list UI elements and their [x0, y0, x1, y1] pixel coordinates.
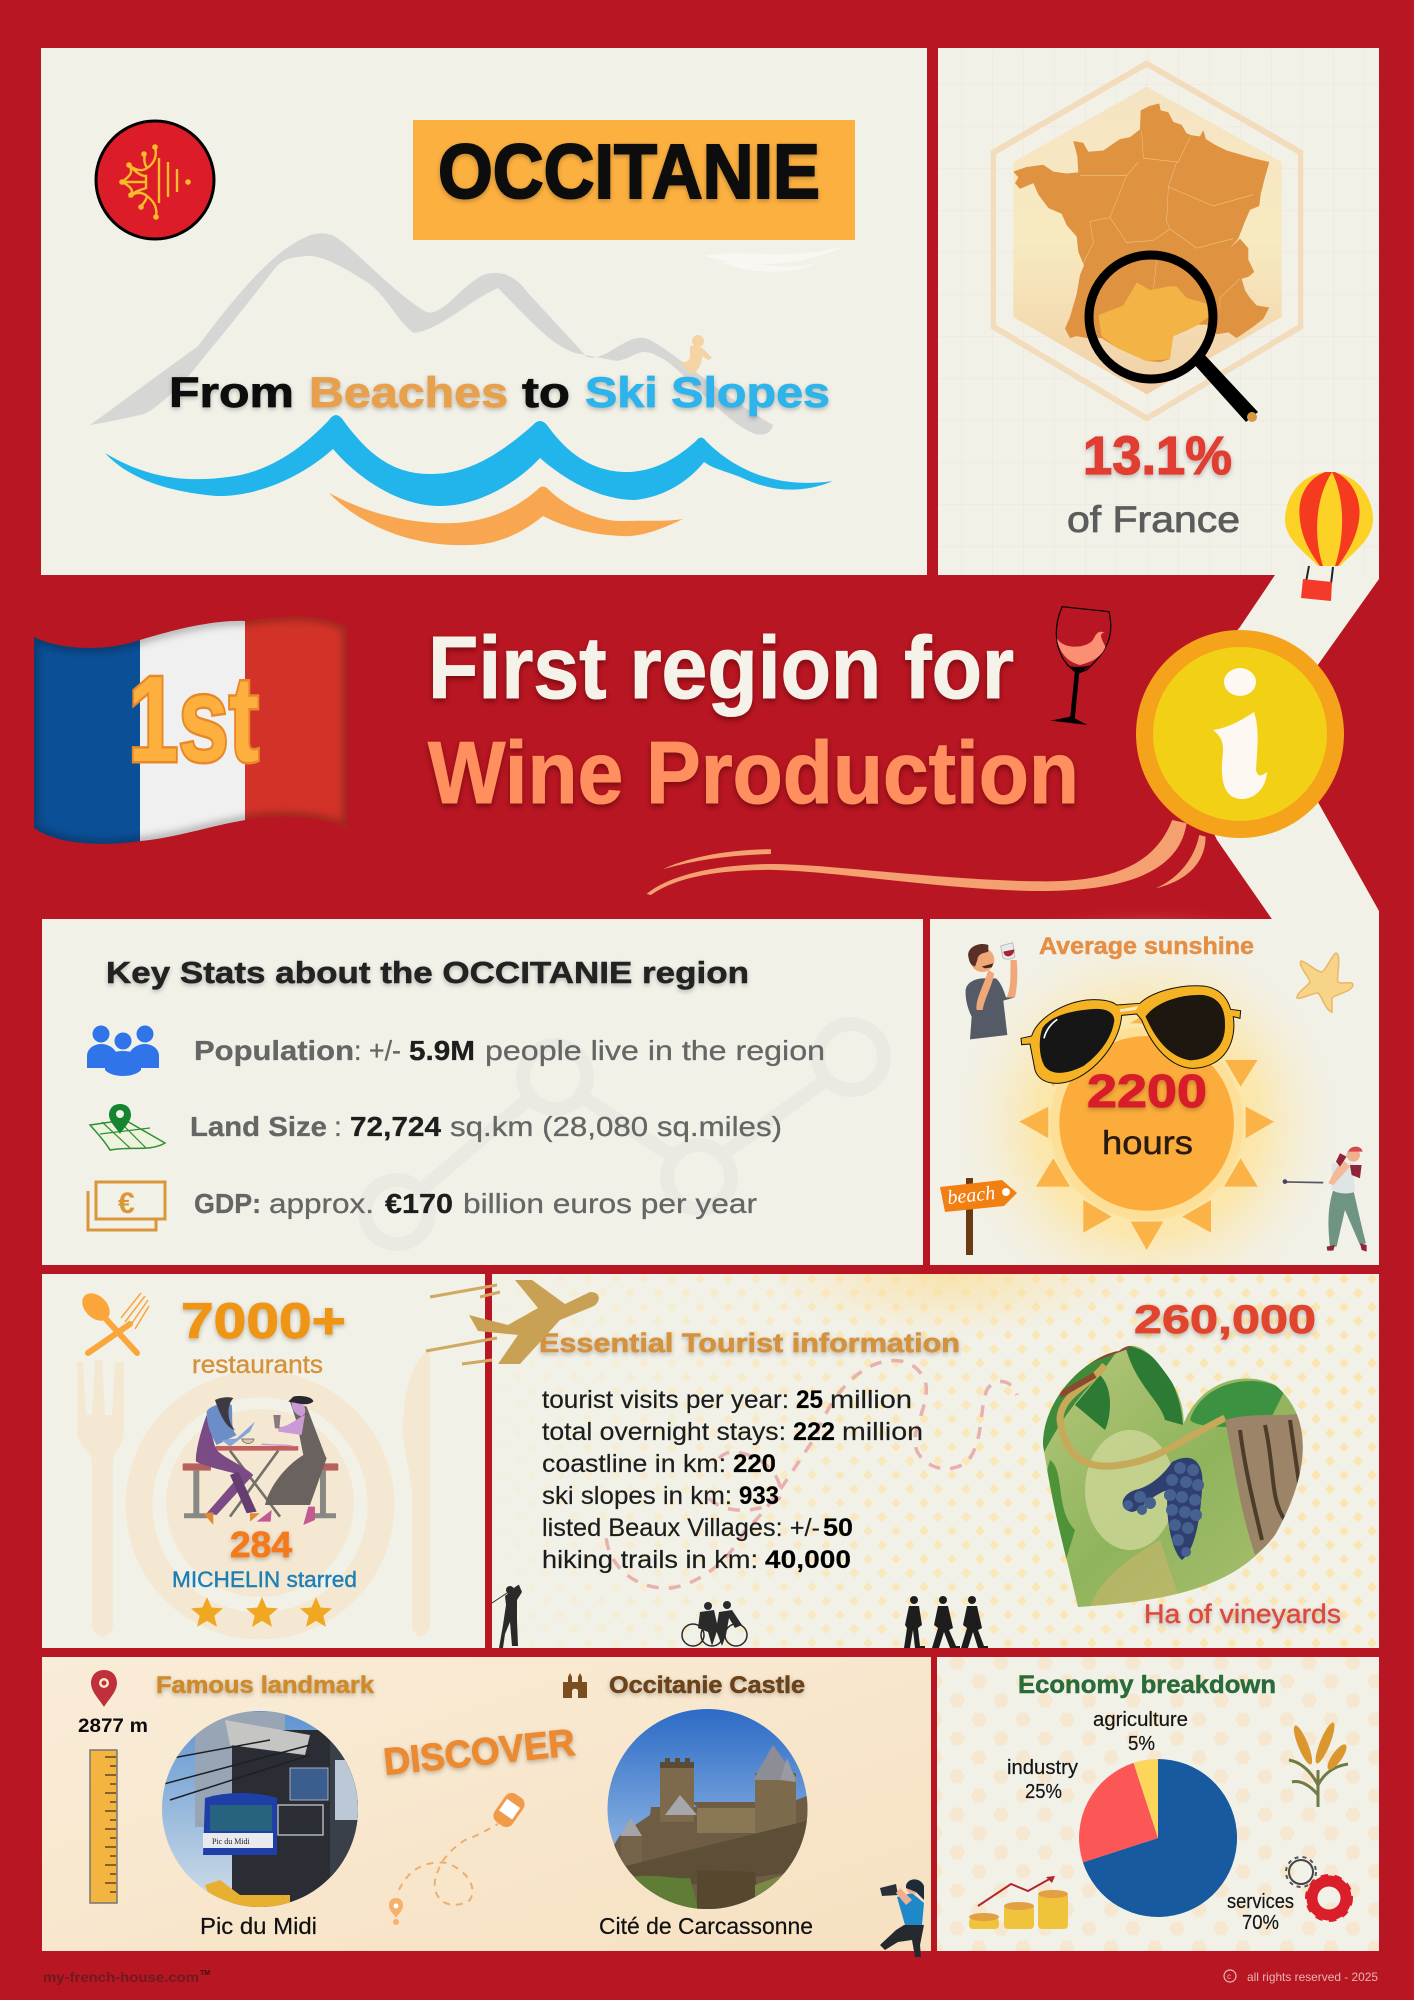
list: tourist facts: 933: [739, 1482, 779, 1510]
illustration: golfer: [1283, 1147, 1367, 1252]
headline: first region for wine production: [428, 618, 1079, 822]
stars: [191, 1597, 332, 1627]
stat: population: [194, 1035, 825, 1066]
illustration: mountains: [90, 233, 773, 435]
list: tourist facts: 222: [793, 1418, 835, 1446]
band: diagonal road: [1180, 575, 1379, 925]
icon: starfish: [1297, 953, 1353, 1012]
icon: ruler: [90, 1750, 117, 1903]
label: Cité de Carcassonne: Cité de Carcassonne: [599, 1913, 813, 1939]
stat: 284: 284: [230, 1524, 292, 1565]
headline: first region for wine production: First region for: [428, 618, 1014, 717]
label: agriculture: agriculture: [1093, 1709, 1188, 1731]
icon: hot air balloon: [1285, 472, 1373, 601]
list: tourist facts: coastline in km:: [542, 1450, 726, 1478]
watermark: network: [365, 1024, 884, 1244]
label: Pic du Midi: Pic du Midi: [200, 1913, 317, 1939]
swoosh trail: [647, 820, 1206, 895]
divider: panel separator: [927, 52, 938, 575]
list: tourist facts: 25: [796, 1386, 823, 1414]
icon: castle: [563, 1673, 587, 1698]
map of France in hexagon: [993, 64, 1301, 418]
label: Ha of vineyards: Ha of vineyards: [1144, 1599, 1341, 1629]
icon: information medal: [1136, 630, 1344, 838]
label: agriculture: 5%: [1128, 1733, 1155, 1755]
France shape: [1013, 103, 1269, 362]
stat: GDP: GDP:: [194, 1188, 261, 1219]
label: industry: industry: [1007, 1757, 1078, 1779]
panel: title: [41, 48, 927, 575]
stat: 2200: 2200: [1087, 1065, 1207, 1117]
glow above sunshine panel: [1020, 905, 1280, 945]
label: restaurants: restaurants: [192, 1351, 323, 1379]
icon: skier: [678, 335, 712, 374]
label: services: 70%: [1242, 1912, 1279, 1934]
icon: wheat: [1289, 1721, 1350, 1807]
icon: beach sign: [940, 1178, 1017, 1255]
sun: [1019, 1013, 1274, 1250]
footer: website: TM: [200, 1970, 210, 1977]
heading: essential tourist information: Essential Tourist information: [539, 1328, 960, 1358]
subtitle: to: [522, 369, 570, 417]
silhouette: golfer: [492, 1585, 522, 1648]
illustration: diners at table: [183, 1396, 338, 1525]
sunglasses: [1021, 986, 1241, 1083]
stat: land size: :: [334, 1111, 342, 1142]
stat: altitude: 2877 m: [78, 1716, 148, 1737]
title: OCCITANIE: [413, 120, 855, 240]
stat: 7000+: 7000+: [181, 1293, 346, 1349]
panel: key stats: [42, 919, 923, 1265]
subtitle: From: [169, 369, 294, 417]
headline: first region for wine production: Wine Production: [428, 723, 1079, 822]
illustration: route with car and pin: [389, 1790, 528, 1925]
heading: economy breakdown: Economy breakdown: [1018, 1671, 1276, 1699]
icon: spoon and fork: [77, 1288, 149, 1353]
illustration: photographer: [880, 1879, 924, 1957]
list: tourist facts: [542, 1386, 923, 1574]
label: agriculture: [1093, 1709, 1188, 1755]
list: tourist facts: million: [830, 1386, 912, 1414]
label: industry: [1007, 1757, 1078, 1803]
heading: key stats: Key Stats about the OCCITANIE region: [106, 955, 749, 990]
list: tourist facts: hiking trails in km:: [542, 1546, 758, 1574]
label: industry: 25%: [1025, 1781, 1062, 1803]
subtitle: [169, 369, 830, 417]
photo: Cité de Carcassonne: [605, 1708, 810, 1915]
decoration: faint clouds: [705, 246, 845, 272]
list: tourist facts: million: [842, 1418, 923, 1446]
label: services: services: [1227, 1891, 1294, 1913]
divider: panel separator: [485, 1274, 492, 1648]
list: tourist facts: ski slopes in km:: [542, 1482, 732, 1510]
stat: GDP: [194, 1188, 757, 1219]
label: MICHELIN starred: MICHELIN starred: [172, 1567, 357, 1592]
stat: land size: [190, 1111, 782, 1142]
list: tourist facts: 40,000: [765, 1546, 851, 1574]
subtitle: Ski Slopes: [585, 369, 830, 417]
stat: land size: sq.km (28,080 sq.miles): [450, 1111, 782, 1142]
photo: vineyard heart: [1043, 1346, 1303, 1607]
subtitle: Beaches: [309, 369, 508, 417]
emblem: Occitan cross: [96, 121, 214, 239]
pie chart: [1079, 1759, 1237, 1917]
footer: copyright: all rights reserved - 2025: [1247, 1970, 1378, 1984]
Occitanie highlight: [1098, 283, 1208, 361]
label: of France: of France: [1067, 499, 1240, 540]
stat: GDP: approx.: [269, 1188, 374, 1219]
list: tourist facts: 50: [823, 1514, 853, 1542]
footer: website: my-french-house.com: [43, 1969, 199, 1985]
stat: GDP: billion euros per year: [463, 1188, 757, 1219]
icon: euro bills: €: [118, 1187, 135, 1220]
icon: beach sign: beach: [946, 1182, 996, 1209]
illustration: man tasting wine: [966, 943, 1017, 1039]
icon: euro bills: [88, 1182, 165, 1230]
stat: population: : +/-: [354, 1035, 401, 1066]
panel: share of France: [938, 48, 1379, 575]
magnifying glass: [1089, 255, 1258, 422]
stat: GDP: €170: [385, 1188, 453, 1219]
flag with 1st badge: [34, 600, 347, 850]
dashed route: [606, 1360, 1017, 1588]
title: OCCITANIE: OCCITANIE: [438, 129, 820, 215]
silhouette: cyclists: [682, 1601, 747, 1646]
heading: Occitanie Castle: Occitanie Castle: [609, 1672, 805, 1699]
panel: restaurants: [42, 1274, 485, 1648]
list: tourist facts: listed Beaux Villages: +/-: [542, 1514, 820, 1542]
silhouette: hikers: [904, 1596, 988, 1648]
icon: gears: [1286, 1857, 1350, 1919]
text: 1st: 1st: [128, 651, 259, 787]
list: tourist facts: tourist visits per year:: [542, 1386, 789, 1414]
heading: average sunshine: Average sunshine: [1039, 933, 1254, 960]
photo: Pic du Midi cable car: Pic du Midi: [212, 1837, 251, 1846]
illustration: orange wave: [329, 486, 683, 545]
panel: sunshine: [930, 919, 1379, 1265]
panel: economy: [937, 1657, 1379, 1951]
footer: copyright: c: [1227, 1972, 1231, 1981]
icon: wine glass: [1050, 607, 1111, 725]
icon: location pin: [91, 1670, 117, 1707]
icon: people: [87, 1026, 159, 1076]
panel: landmarks: [42, 1657, 931, 1951]
stat: 13.1%: 13.1%: [1083, 426, 1232, 486]
watermark: plate and cutlery: [77, 1348, 430, 1636]
stat: population: people live in the region: [485, 1035, 825, 1066]
stat: land size: 72,724: [350, 1111, 441, 1142]
list: tourist facts: total overnight stays:: [542, 1418, 786, 1446]
panel: tourist information: [492, 1274, 1379, 1648]
stat: population: 5.9M: [409, 1035, 475, 1066]
stat: 260,000: 260,000: [1134, 1298, 1316, 1342]
heading: famous landmark: Famous landmark: [156, 1672, 375, 1699]
label: hours: hours: [1102, 1124, 1193, 1161]
list: tourist facts: 220: [733, 1450, 776, 1478]
photo: Pic du Midi cable car: [160, 1710, 362, 1912]
stat: population: Population: [194, 1035, 354, 1066]
icon: map with pin: [90, 1104, 165, 1150]
icon: airplane with speed lines: [426, 1280, 599, 1364]
label: services: [1227, 1891, 1294, 1934]
icon: coins with rising arrow: [969, 1876, 1068, 1929]
stat: land size: Land Size: [190, 1111, 327, 1142]
illustration: blue waves: [105, 415, 833, 506]
text: DISCOVER: DISCOVER: [382, 1722, 577, 1784]
